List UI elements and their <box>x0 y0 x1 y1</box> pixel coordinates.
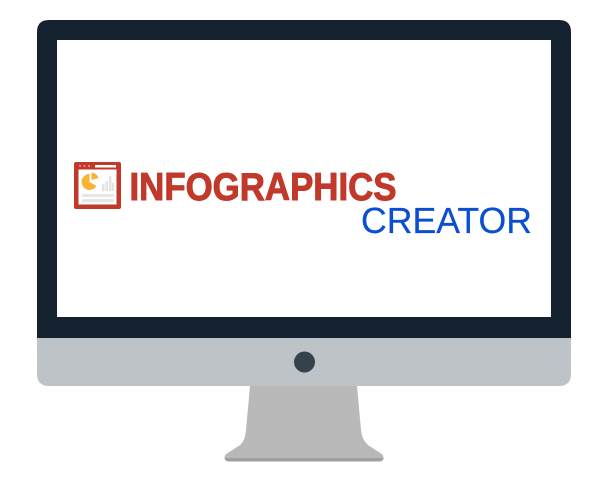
monitor stand <box>224 386 384 462</box>
logo icon: browser window with charts <box>74 162 121 209</box>
screen <box>57 40 551 317</box>
pie chart icon <box>82 172 98 190</box>
logo subtitle: CREATOR <box>361 200 532 241</box>
monitor chin <box>37 338 571 386</box>
monitor bezel <box>37 20 571 338</box>
camera button <box>294 352 315 372</box>
text lines <box>82 194 114 202</box>
logo wordmark: INFOGRAPHICS <box>130 166 396 209</box>
bar chart icon <box>102 176 114 191</box>
